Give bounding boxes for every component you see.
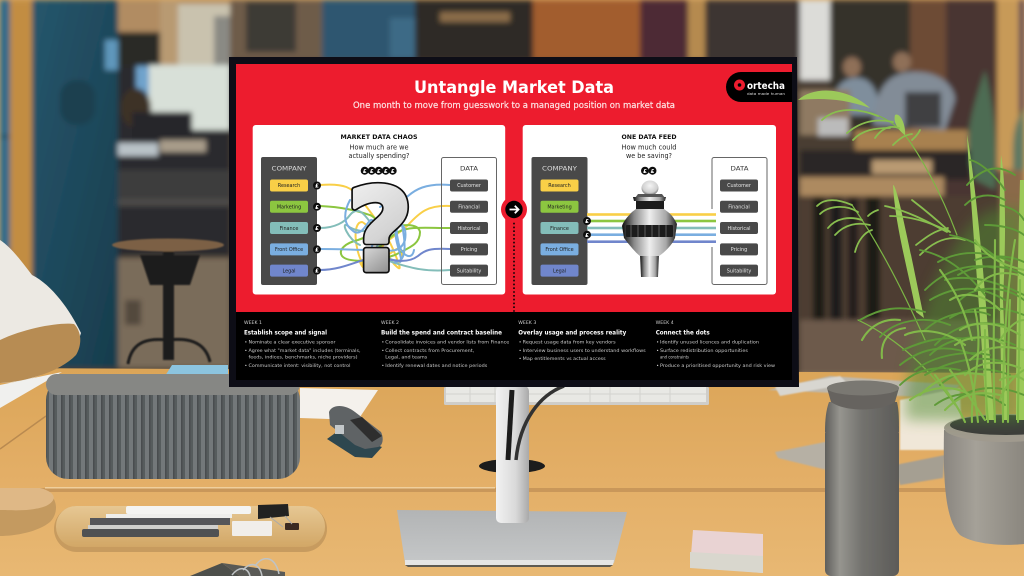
week 1: • (244, 349, 248, 354)
spend coins: five pounds: £ (391, 169, 395, 175)
panel question: How much could (622, 144, 676, 152)
company column: COMPANY (542, 166, 577, 172)
company column: Research (278, 183, 300, 189)
spend coins: five pounds: £ (363, 169, 367, 175)
pound coins on feed: £ (585, 219, 589, 225)
week 1: • (244, 340, 248, 346)
week 1: Communicate intent: visibility, not control (248, 363, 350, 369)
pound coins on company lines: £ (315, 184, 319, 190)
week 1: Nominate a clear executive sponsor (248, 340, 336, 346)
company column: Legal (553, 268, 566, 274)
week 3: • (519, 357, 522, 362)
company column (532, 157, 588, 285)
week 4 (656, 320, 775, 369)
week 3: • (519, 340, 522, 346)
panel heading: MARKET DATA CHAOS (340, 134, 418, 141)
data column: Pricing (731, 247, 747, 253)
arrow between panels (501, 196, 527, 222)
week 1: feeds, indices, benchmarks, niche providers) (248, 355, 358, 361)
screen: red background (236, 64, 792, 312)
plant foliage mass (905, 208, 1024, 422)
panel question (348, 144, 410, 160)
pound coins on company lines: £ (315, 205, 319, 211)
pound coins on feed (583, 217, 591, 239)
monitor stand (397, 386, 627, 567)
logo: ortecha: data made human (747, 92, 785, 96)
desk surface (0, 368, 1024, 576)
week 1: Agree what "market data" includes (terminals, (248, 348, 361, 354)
pound coins on company lines: £ (315, 248, 319, 254)
panel question: we be saving? (626, 152, 672, 160)
lamp (0, 240, 81, 408)
pink note block (690, 530, 763, 573)
data column (442, 158, 496, 284)
data column: Customer (727, 183, 752, 189)
spend coins: five pounds: £ (370, 169, 374, 175)
title: Untangle Market Data (414, 78, 614, 97)
single feed lines (587, 213, 716, 243)
panel: one data feed (523, 125, 776, 294)
subtitle: One month to move from guesswork to a managed position on market data (353, 101, 675, 111)
week 3: Map entitlements vs actual access (523, 356, 606, 362)
data column: Customer (457, 183, 482, 189)
spend coins: five pounds (361, 167, 397, 175)
week 3: Interview business users to understand workflows (523, 348, 646, 354)
screen: black footer (236, 312, 792, 380)
company column: Marketing (547, 204, 572, 210)
company column: Front Office (275, 247, 303, 253)
week 2: Legal, and teams (385, 355, 428, 361)
blue note on desk (165, 365, 228, 376)
office background (0, 0, 1024, 375)
stapler (327, 406, 383, 458)
company column: Finance (550, 226, 569, 232)
plant pot (944, 414, 1024, 545)
paper (300, 388, 378, 420)
monitor bezel (229, 57, 799, 387)
data column: Suitability (457, 268, 481, 274)
spend coins: two pounds: £ (651, 169, 655, 175)
week 1 (244, 320, 361, 369)
week 3 (518, 320, 646, 362)
week 2: • (382, 364, 384, 369)
data column: DATA (460, 166, 479, 172)
icon: question mark: ? (347, 164, 413, 297)
dotted divider (513, 219, 515, 312)
week 2: Build the spend and contract baseline (381, 330, 502, 337)
week 4: and constraints (660, 355, 689, 361)
spend coins: two pounds: £ (643, 169, 647, 175)
company column: Finance (280, 226, 298, 232)
icon: question mark: ? (347, 164, 413, 297)
week 4: Surface redistribution opportunities (660, 348, 749, 354)
week 1: • (244, 364, 248, 369)
company column: COMPANY (272, 166, 307, 172)
week 4: WEEK 4 (656, 320, 674, 326)
week 3: Request usage data from key vendors (523, 340, 616, 346)
company column: Marketing (277, 204, 301, 210)
spend coins: two pounds (641, 167, 656, 175)
pound coins on feed: £ (585, 233, 589, 239)
spend coins: five pounds: £ (384, 169, 388, 175)
week 3: Overlay usage and process reality (518, 330, 626, 337)
spend coins: five pounds: £ (377, 169, 381, 175)
week 4: Identify unused licences and duplication (660, 340, 759, 346)
week 4: • (656, 364, 659, 369)
week 1: Establish scope and signal (244, 330, 327, 337)
panel question (622, 144, 676, 160)
wooden disc (0, 488, 56, 536)
data column (709, 158, 767, 284)
data column: Historical (458, 226, 480, 232)
keyboard (444, 387, 709, 405)
company column: Front Office (545, 247, 574, 253)
plant (798, 91, 1024, 422)
week 4: • (656, 340, 659, 346)
pound coins on company lines (313, 182, 321, 275)
week 2 (381, 320, 509, 369)
data column: DATA (730, 166, 749, 172)
panel: market data chaos (253, 125, 505, 297)
icon: control tower (622, 180, 677, 277)
week 4: Produce a prioritised opportunity and risk view (660, 363, 775, 369)
week 2: WEEK 2 (381, 320, 399, 326)
logo: ortecha: ortecha (747, 81, 785, 92)
panel question: actually spending? (348, 152, 410, 160)
data column: Financial (458, 204, 480, 210)
pound coins on company lines: £ (315, 226, 319, 232)
panel heading: ONE DATA FEED (622, 134, 676, 141)
desk joint (0, 416, 1024, 492)
week 3: WEEK 3 (518, 320, 537, 326)
week 2: Identify renewal dates and notice periods (385, 363, 488, 369)
tangled lines (320, 185, 450, 271)
week 2: • (382, 340, 384, 346)
flask (825, 380, 899, 576)
stool (112, 238, 224, 364)
week 4: Connect the dots (656, 330, 710, 337)
company column: Legal (282, 268, 296, 274)
ring binder (190, 559, 285, 576)
pound coins on company lines: £ (315, 269, 319, 275)
week 2: Collect contracts from Procurement, (385, 348, 475, 354)
company column (261, 157, 317, 285)
week 2: • (382, 349, 384, 354)
data column: Suitability (727, 268, 751, 274)
tablet and box, right of desk (768, 376, 962, 485)
monitor (229, 57, 799, 387)
pen tray (54, 504, 327, 552)
logo: ortecha (726, 72, 792, 102)
week 2: Consolidate invoices and vendor lists from Finance (385, 340, 509, 346)
panel question: How much are we (350, 144, 408, 152)
week 1: WEEK 1 (244, 320, 262, 326)
data column: Historical (728, 226, 750, 232)
fluted storage box (46, 374, 300, 479)
week 4: • (656, 349, 659, 354)
week 3: • (519, 349, 522, 354)
company column: Research (548, 183, 571, 189)
data column: Financial (728, 204, 750, 210)
data column: Pricing (461, 247, 477, 253)
